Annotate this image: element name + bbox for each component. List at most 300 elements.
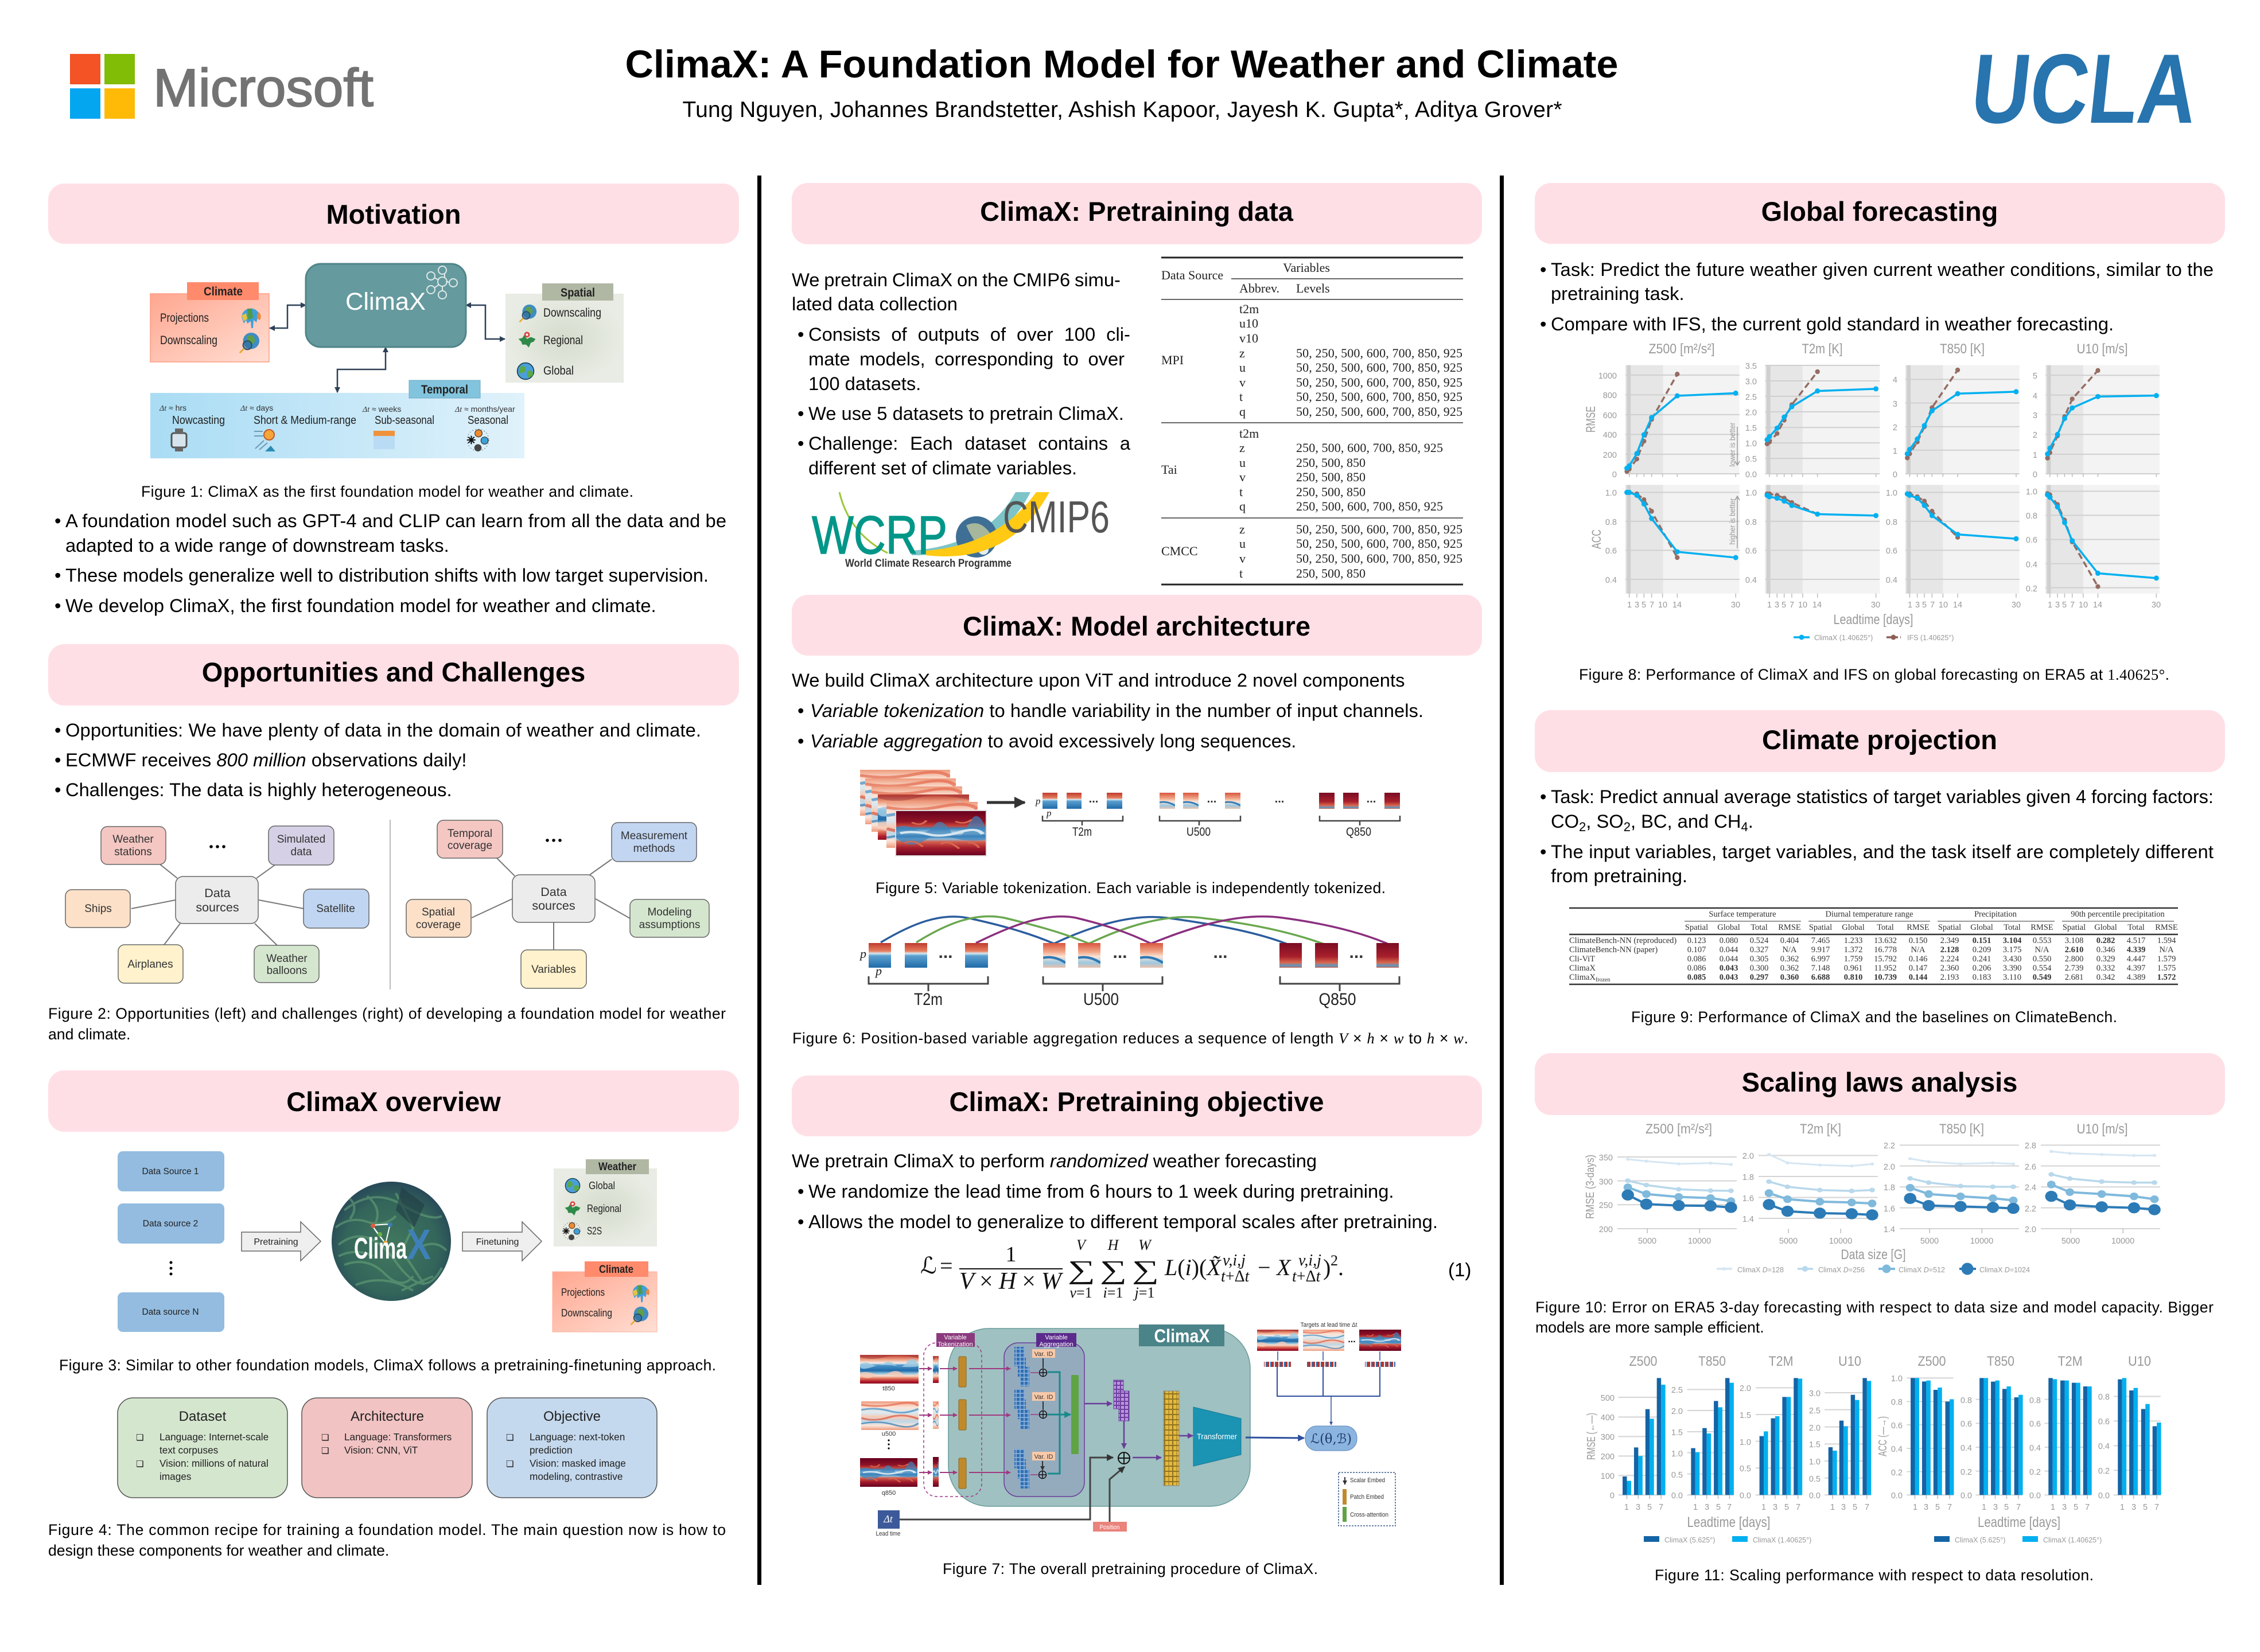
- table: ClimateBench results: 0.549: [2033, 973, 2051, 982]
- table: ClimateBench results: Surface temperature: [1709, 910, 1776, 919]
- ticks: 2.2: [2025, 1205, 2036, 1214]
- x ticks: 3: [1924, 1503, 1928, 1512]
- equation 1: V × H × W: [959, 1268, 1064, 1295]
- figure 6: variable aggregation: p: [859, 946, 866, 961]
- caption: figure 2: and climate.: [48, 1026, 130, 1043]
- y-axis ticks: 400: [1603, 431, 1617, 440]
- x ticks: 10000: [1829, 1237, 1852, 1246]
- equation 1: v,i,j: [1298, 1252, 1321, 1269]
- x-axis ticks: 7: [1790, 601, 1794, 610]
- panel: ClimaX overview: [48, 1070, 739, 1559]
- legend: ClimaX D=1024: [1979, 1266, 2030, 1274]
- chart titles: T2m [K]: [1800, 1121, 1841, 1137]
- y-axis ticks: 0.5: [1745, 455, 1757, 464]
- table: ClimateBench results: 0.123: [1687, 936, 1706, 945]
- legends: ClimaX (5.625°): [1664, 1536, 1715, 1544]
- table: ClimateBench results: RMSE: [2155, 923, 2178, 932]
- table: ClimateBench results: 1.579: [2157, 954, 2176, 964]
- climate box: Downscaling: [561, 1307, 612, 1319]
- figure 2: data sources diagram left: sources: [196, 901, 239, 914]
- x ticks: 1: [1761, 1503, 1766, 1512]
- brackets and labels: [869, 976, 1399, 991]
- table: CMIP6 datasets: 250, 500, 600, 700, 850, 925: [1296, 499, 1443, 513]
- table: ClimateBench results: 0.151: [1973, 936, 1991, 945]
- table: CMIP6 datasets: [1161, 258, 1463, 585]
- spatial box: [505, 283, 624, 383]
- figure 2: data sources diagram left: Weather: [266, 953, 308, 965]
- table: CMIP6 datasets: z: [1239, 522, 1245, 536]
- x-axis ticks: 1: [1767, 601, 1772, 610]
- x-axis ticks: 3: [1915, 601, 1920, 610]
- x ticks: 3: [1773, 1503, 1777, 1512]
- bars and gridlines: [1619, 1378, 2161, 1499]
- text block: architecture: [792, 669, 1423, 751]
- y-axis ticks: 0.0: [1745, 470, 1757, 480]
- table: ClimateBench results: Global: [1842, 923, 1865, 932]
- text block: motivation bullets: •: [55, 595, 61, 616]
- table: ClimateBench results: 0.080: [1720, 936, 1738, 945]
- y-axis ticks: 3: [1893, 400, 1897, 409]
- table: ClimateBench results: ClimateBench-NN (paper): [1569, 945, 1658, 954]
- figure 2: data sources diagram left: stations: [114, 846, 152, 858]
- table: ClimateBench results: 0.305: [1750, 954, 1768, 964]
- axis titles: ACC: [1589, 529, 1604, 549]
- x-axis ticks: 14: [1672, 601, 1682, 610]
- table: ClimateBench results: N/A: [2035, 945, 2049, 954]
- inputs: [860, 1355, 939, 1497]
- x-axis ticks: 30: [2012, 601, 2021, 610]
- table: ClimateBench results: 2.610: [2065, 945, 2083, 954]
- table: ClimateBench results: 0.342: [2096, 973, 2115, 982]
- panel: climate projection: [1535, 710, 2225, 1026]
- table: CMIP6 datasets: 50, 250, 500, 600, 700, 850, 925: [1296, 551, 1462, 566]
- y-axis ticks: 0.6: [2026, 536, 2037, 545]
- table: ClimateBench results: 0.209: [1973, 945, 1991, 954]
- table: CMIP6 datasets: 50, 250, 500, 600, 700, 850, 925: [1296, 346, 1462, 360]
- y ticks: 0.0: [1740, 1491, 1751, 1501]
- table: CMIP6 datasets: v: [1239, 551, 1246, 566]
- add nodes: [1030, 1358, 1047, 1479]
- heading: Motivation: [48, 184, 739, 244]
- y-axis ticks: 0.8: [1886, 518, 1897, 527]
- x-axis ticks: 3: [2055, 601, 2060, 610]
- table: ClimateBench results: 1.233: [1844, 936, 1862, 945]
- lead time input: Δt: [883, 1513, 893, 1525]
- x-axis ticks: 1: [1627, 601, 1632, 610]
- chart titles: T2m [K]: [1802, 341, 1843, 357]
- y-axis ticks: 1.0: [1745, 489, 1757, 498]
- climate box: Climate: [599, 1264, 633, 1276]
- table: CMIP6 datasets: 50, 250, 500, 600, 700, 850, 925: [1296, 536, 1462, 551]
- chart titles: [1649, 341, 2127, 357]
- table: ClimateBench results: 0.107: [1687, 945, 1706, 954]
- table: ClimateBench results: 7.148: [1811, 964, 1830, 973]
- x ticks: 5000: [1638, 1237, 1656, 1246]
- caption: figure 8: Figure 8: Performance of ClimaX and IFS on global forecasting on ERA5 at 1.40625°.: [1579, 666, 2169, 683]
- y ticks: 0.6: [1891, 1421, 1903, 1431]
- legend: ClimaX (1.40625°): [1814, 634, 1873, 642]
- heading: Pretraining data: [792, 183, 1482, 244]
- axis titles: RMSE: [1584, 406, 1598, 433]
- arrow: finetuning: [462, 1222, 542, 1261]
- card: architecture: ❏: [321, 1432, 329, 1443]
- card: dataset: [118, 1398, 287, 1498]
- token column: [1164, 1391, 1179, 1486]
- figure 5: variable tokenization: ...: [1207, 793, 1216, 805]
- y ticks: 0.2: [2029, 1468, 2041, 1477]
- table: ClimateBench results: Cli-ViT: [1569, 954, 1595, 964]
- table: ClimateBench results: N/A: [2160, 945, 2174, 954]
- table: ClimateBench results: 0.554: [2033, 964, 2052, 973]
- text block: climate projection: [1540, 786, 2214, 886]
- y-axis ticks: 0.8: [1605, 518, 1617, 527]
- climate box: [150, 282, 269, 362]
- y ticks: 2.0: [1671, 1407, 1683, 1416]
- axis titles: [1584, 1155, 1906, 1263]
- figure 1: ClimaX tasks diagram: ClimaX: [345, 288, 426, 315]
- x ticks: 10000: [2111, 1237, 2134, 1246]
- table: CMIP6 datasets: 50, 250, 500, 600, 700, 850, 925: [1296, 522, 1462, 536]
- figure 2: data sources diagram left: Simulated: [277, 833, 325, 846]
- text block: pretraining data: lated data collection: [792, 293, 958, 314]
- heading: Model architecture: ClimaX: Model architecture: [963, 611, 1310, 641]
- table: CMIP6 datasets: z: [1239, 441, 1245, 455]
- y ticks: 0.6: [1961, 1420, 1972, 1429]
- figure 2: challenges diagram right: coverage: [448, 840, 492, 852]
- legends: ClimaX (1.40625°): [1753, 1536, 1811, 1544]
- caption: figure 5: Figure 5: Variable tokenization. Each variable is independently tokenized.: [876, 879, 1386, 897]
- figure 5: variable tokenization: T2m: [1072, 825, 1092, 839]
- y ticks: 0.0: [2098, 1491, 2110, 1501]
- spatial box: Spatial: [561, 286, 595, 299]
- table: ClimateBench results: 1.759: [1844, 954, 1862, 964]
- table: ClimateBench results: 0.810: [1844, 973, 1862, 982]
- axis titles: [1585, 1413, 2060, 1530]
- card: dataset: images: [160, 1471, 191, 1482]
- table: ClimateBench results: Global: [1970, 923, 1993, 932]
- text block: pretraining data: 100 datasets.: [808, 373, 921, 394]
- x ticks: 5: [2074, 1503, 2078, 1512]
- figure 8: RMSE and ACC line charts: [1584, 341, 2161, 642]
- heading: Opportunities and Challenges: Opportunities and Challenges: [202, 657, 585, 687]
- x-axis ticks: 7: [1650, 601, 1654, 610]
- ticks: 1.4: [1742, 1215, 1754, 1224]
- equation 1: .: [1338, 1254, 1344, 1280]
- heading: Opportunities and Challenges: [48, 644, 739, 706]
- text block: climate projection: •: [1540, 841, 1546, 862]
- figure 5: variable tokenization: [860, 770, 1400, 856]
- y ticks: 300: [1601, 1433, 1615, 1442]
- x-axis ticks: 3: [1635, 601, 1639, 610]
- panel: global forecasting: [1535, 183, 2225, 683]
- table: ClimateBench results: Diurnal temperature range: [1826, 910, 1913, 919]
- title: ClimaX: A Foundation Model for Weather and Climate: [625, 42, 1618, 86]
- equation 1: v,i,j: [1223, 1252, 1246, 1269]
- y-axis ticks: 1000: [1598, 372, 1617, 381]
- equation 1: i=1: [1103, 1284, 1123, 1301]
- x-axis ticks: [1627, 601, 2161, 610]
- x ticks: [1638, 1237, 2134, 1246]
- output arrow: [1246, 1437, 1304, 1438]
- position input: [1093, 1467, 1127, 1532]
- legend: ClimaX D=128: [1737, 1266, 1784, 1274]
- y-axis ticks: 1.0: [1605, 489, 1617, 498]
- y ticks: 0.0: [1671, 1491, 1683, 1501]
- table: ClimateBench results: 0.086: [1687, 964, 1706, 973]
- equation 1: 2: [1331, 1252, 1338, 1269]
- aggregation curves: [881, 916, 1387, 944]
- table: ClimateBench results: 0.362: [1780, 964, 1799, 973]
- y ticks: 2.0: [1740, 1384, 1751, 1393]
- x-axis ticks: 10: [2079, 601, 2088, 610]
- text block: climate projection: 2: [1624, 820, 1631, 834]
- data sources: Data source N: [142, 1307, 199, 1317]
- variable id boxes: Var. ID: [1034, 1394, 1053, 1401]
- table: ClimateBench results: 0.332: [2096, 964, 2115, 973]
- card: objective: ❏: [506, 1459, 514, 1469]
- x-axis ticks: 7: [2070, 601, 2075, 610]
- y ticks: 1.0: [1891, 1374, 1903, 1384]
- card: objective: Vision: masked image: [530, 1458, 626, 1469]
- panel: model architecture: [792, 595, 1482, 1047]
- table: ClimateBench results: 3.108: [2065, 936, 2083, 945]
- axis titles: ACC (—→): [1877, 1416, 1889, 1456]
- chart titles: T850 [K]: [1940, 341, 1985, 357]
- y-axis ticks: 0: [1612, 470, 1617, 480]
- y-axis ticks: 600: [1603, 411, 1617, 420]
- x-axis ticks: 30: [2152, 601, 2161, 610]
- heading: Pretraining objective: ClimaX: Pretraining objective: [950, 1086, 1324, 1117]
- text block: objective: •: [798, 1180, 804, 1202]
- y ticks: 400: [1601, 1413, 1615, 1423]
- ticks: 2.8: [2025, 1141, 2036, 1151]
- y ticks: 0.2: [1891, 1468, 1903, 1478]
- equation 1: L(i)(X̃: [1164, 1254, 1222, 1280]
- temporal box: Sub-seasonal: [375, 414, 434, 427]
- y-axis ticks: 0.6: [1605, 547, 1617, 556]
- legend: Scalar Embed: [1350, 1477, 1385, 1484]
- data sources: [118, 1151, 224, 1332]
- caption: figure 4: [48, 1521, 726, 1559]
- text block: pretraining data: •: [798, 403, 804, 424]
- ticks: 2.0: [2025, 1225, 2036, 1234]
- variable tokenization: [924, 1333, 982, 1497]
- caption: figure 10: Figure 10: Error on ERA5 3-day forecasting with respect to data size and model capacity. Bigger: [1535, 1299, 2214, 1316]
- x ticks: 5: [1935, 1503, 1940, 1512]
- y-axis ticks: 3.5: [1745, 362, 1757, 371]
- x ticks: 1: [2120, 1503, 2125, 1512]
- figure 2: challenges diagram right: methods: [633, 843, 675, 855]
- patches: [869, 943, 1399, 968]
- inputs: q850: [882, 1490, 896, 1497]
- y ticks: 1.5: [1740, 1411, 1751, 1420]
- ticks: 2.6: [2025, 1163, 2036, 1172]
- temporal box: Δt ≈ hrs: [159, 403, 186, 413]
- x ticks: 1: [1982, 1503, 1986, 1512]
- x ticks: 1: [1913, 1503, 1917, 1512]
- equation 1: ): [1323, 1254, 1331, 1280]
- caption: figure 4: Figure 4: The common recipe for training a foundation model. The main question now is how to: [48, 1521, 726, 1538]
- legend: Cross-attention: [1350, 1511, 1388, 1518]
- y ticks: 0.2: [1961, 1468, 1972, 1477]
- table: ClimateBench results: 0.086: [1687, 954, 1706, 964]
- y-axis ticks: 0.4: [1605, 576, 1617, 585]
- table: CMIP6 datasets: u: [1239, 455, 1246, 470]
- text block: architecture: Variable tokenization to handle variability in the number of input channels.: [810, 700, 1423, 721]
- x ticks: 3: [2131, 1503, 2136, 1512]
- variable id boxes: [1032, 1349, 1055, 1460]
- text block: motivation bullets: [55, 510, 726, 616]
- table: ClimateBench results: 0.329: [2096, 954, 2115, 964]
- weather box: Global: [589, 1179, 615, 1191]
- x ticks: 3: [1841, 1503, 1846, 1512]
- card: dataset: Dataset: [179, 1409, 227, 1424]
- figure 5: variable tokenization: ...: [1089, 793, 1098, 805]
- equation 1: H: [1107, 1237, 1119, 1253]
- lead time input: Lead time: [876, 1530, 901, 1537]
- axis titles: Data size [G]: [1841, 1247, 1906, 1263]
- table: ClimateBench results: ClimaX: [1569, 964, 1596, 973]
- card: architecture: Architecture: [351, 1409, 424, 1424]
- table: ClimateBench results: 3.390: [2003, 964, 2021, 973]
- legends: ClimaX (5.625°): [1955, 1536, 2005, 1544]
- spatial box: Global: [543, 364, 574, 377]
- x-axis ticks: 10: [1798, 601, 1807, 610]
- x-axis ticks: 14: [2093, 601, 2102, 610]
- x ticks: 3: [1993, 1503, 1998, 1512]
- table: ClimateBench results: 3.175: [2003, 945, 2021, 954]
- table: CMIP6 datasets: u: [1239, 536, 1246, 551]
- equation 1: W: [1138, 1237, 1152, 1253]
- equation 1: t+Δt: [1221, 1268, 1250, 1285]
- figure 2: challenges diagram right: Variables: [531, 964, 576, 976]
- table: ClimateBench results: [1569, 908, 2178, 984]
- figure 6: variable aggregation: T2m: [914, 990, 943, 1009]
- table: CMIP6 datasets: 50, 250, 500, 600, 700, 850, 925: [1296, 404, 1462, 419]
- y ticks: 0.0: [2029, 1491, 2041, 1501]
- table: ClimateBench results: RMSE: [1907, 923, 1930, 932]
- text block: climate projection: , BC, and CH: [1631, 811, 1741, 832]
- table: ClimateBench results: 4.389: [2127, 973, 2145, 982]
- y-axis ticks: 4: [2033, 392, 2037, 401]
- y-axis ticks: 0.6: [1745, 547, 1757, 556]
- caption: figure 10: [1535, 1299, 2214, 1336]
- table: ClimateBench results: Spatial: [1685, 923, 1708, 932]
- y-axis ticks: 0.4: [1745, 576, 1757, 585]
- equation 1: −: [1258, 1254, 1271, 1280]
- embedded patch stacks: [1014, 1347, 1029, 1489]
- x ticks: 1: [1693, 1503, 1698, 1512]
- table: ClimateBench results: 3.104: [2003, 936, 2021, 945]
- text block: objective: Allows the model to generalize to different temporal scales after pretraining.: [808, 1211, 1438, 1232]
- text block: motivation bullets: We develop ClimaX, the first foundation model for weather and climate.: [65, 595, 656, 616]
- figure 2: challenges diagram right: Modeling: [647, 906, 692, 918]
- table: CMIP6 datasets: 50, 250, 500, 600, 700, 850, 925: [1296, 389, 1462, 404]
- table: ClimateBench results: 0.044: [1720, 945, 1738, 954]
- y ticks: 1.5: [1671, 1428, 1683, 1437]
- y-axis ticks: 3.0: [1745, 377, 1757, 387]
- table: ClimateBench results: 4.447: [2127, 954, 2145, 964]
- table: ClimateBench results: ClimateBench-NN (reproduced): [1569, 936, 1676, 945]
- card: architecture: ❏: [321, 1446, 329, 1456]
- table: ClimateBench results: ClimaX: [1569, 973, 1596, 982]
- legend: Patch Embed: [1350, 1494, 1384, 1501]
- table: ClimateBench results: 3.430: [2003, 954, 2021, 964]
- table: CMIP6 datasets: z: [1239, 346, 1245, 360]
- weather box: Regional: [587, 1202, 621, 1214]
- table: CMIP6 datasets: t: [1239, 389, 1243, 404]
- data sources: Data Source 1: [142, 1167, 199, 1176]
- figure 11: resolution bar charts: [1585, 1354, 2161, 1544]
- table: ClimateBench results: 0.300: [1750, 964, 1768, 973]
- table: ClimateBench results: 0.147: [1909, 964, 1927, 973]
- plot panels and curves: [1625, 365, 2160, 598]
- better arrows: [1735, 427, 1740, 548]
- table: ClimateBench results: 0.146: [1909, 954, 1927, 964]
- patch embed bars: [959, 1357, 966, 1489]
- y-axis ticks: 0.4: [2026, 560, 2037, 570]
- table: ClimateBench results: 0.553: [2033, 936, 2051, 945]
- variable aggregation: Aggregation: [1039, 1341, 1073, 1348]
- table: ClimateBench results: N/A: [1911, 945, 1926, 954]
- table: ClimateBench results: 2.193: [1940, 973, 1959, 982]
- heading: Motivation: Motivation: [326, 199, 461, 229]
- text block: climate projection: 2: [1579, 820, 1586, 834]
- table: CMIP6 datasets: MPI: [1161, 353, 1184, 367]
- ticks: 1.8: [1884, 1183, 1895, 1193]
- y-axis ticks: 0: [1893, 470, 1897, 480]
- chart titles: U10: [1838, 1354, 1861, 1369]
- y ticks: 0.8: [2098, 1393, 2110, 1402]
- figure 6: variable aggregation: ...: [1113, 943, 1127, 962]
- x-axis ticks: 3: [1775, 601, 1779, 610]
- table: CMIP6 datasets: 250, 500, 850: [1296, 485, 1366, 499]
- inputs: t850: [882, 1385, 895, 1392]
- table: ClimateBench results: 0.241: [1973, 954, 1991, 964]
- table: ClimateBench results: 0.346: [2096, 945, 2115, 954]
- text block: climate projection: Task: Predict annual average statistics of target variables given 4 forcing factors:: [1551, 786, 2214, 807]
- figure 5: variable tokenization: p: [1035, 796, 1041, 806]
- x ticks: [1624, 1503, 2159, 1512]
- x ticks: 5: [1784, 1503, 1789, 1512]
- table: CMIP6 datasets: t2m: [1239, 426, 1259, 441]
- y ticks: 0.6: [2098, 1417, 2110, 1427]
- y-axis ticks: 1: [2033, 451, 2037, 460]
- chart titles: T850: [1987, 1354, 2014, 1369]
- panel: pretraining objective: [792, 1076, 1482, 1577]
- table: ClimateBench results: Global: [1717, 923, 1740, 932]
- table: CMIP6 datasets: u10: [1239, 316, 1258, 330]
- legend: [1339, 1472, 1395, 1526]
- figure 2: data sources diagram left: [65, 826, 369, 983]
- x-axis ticks: 5: [1922, 601, 1927, 610]
- table: ClimateBench results: 11.952: [1874, 964, 1897, 973]
- legend: ClimaX D=256: [1818, 1266, 1865, 1274]
- table: ClimateBench results: 0.550: [2033, 954, 2051, 964]
- x ticks: 10000: [1970, 1237, 1993, 1246]
- card: dataset: Vision: millions of natural: [160, 1458, 269, 1469]
- x ticks: 7: [1947, 1503, 1952, 1512]
- axis titles: RMSE (3-days): [1584, 1155, 1597, 1219]
- y ticks: 0.0: [1809, 1491, 1821, 1501]
- temporal box: Δt ≈ months/year: [454, 404, 515, 414]
- x ticks: 5000: [1779, 1237, 1798, 1246]
- equation 1: ∑: [1132, 1255, 1159, 1284]
- y-axis ticks: 1.0: [1745, 439, 1757, 449]
- table: ClimateBench results: 2.360: [1940, 964, 1959, 973]
- chart titles: T850 [K]: [1939, 1121, 1984, 1137]
- teal merge: [1048, 1372, 1071, 1474]
